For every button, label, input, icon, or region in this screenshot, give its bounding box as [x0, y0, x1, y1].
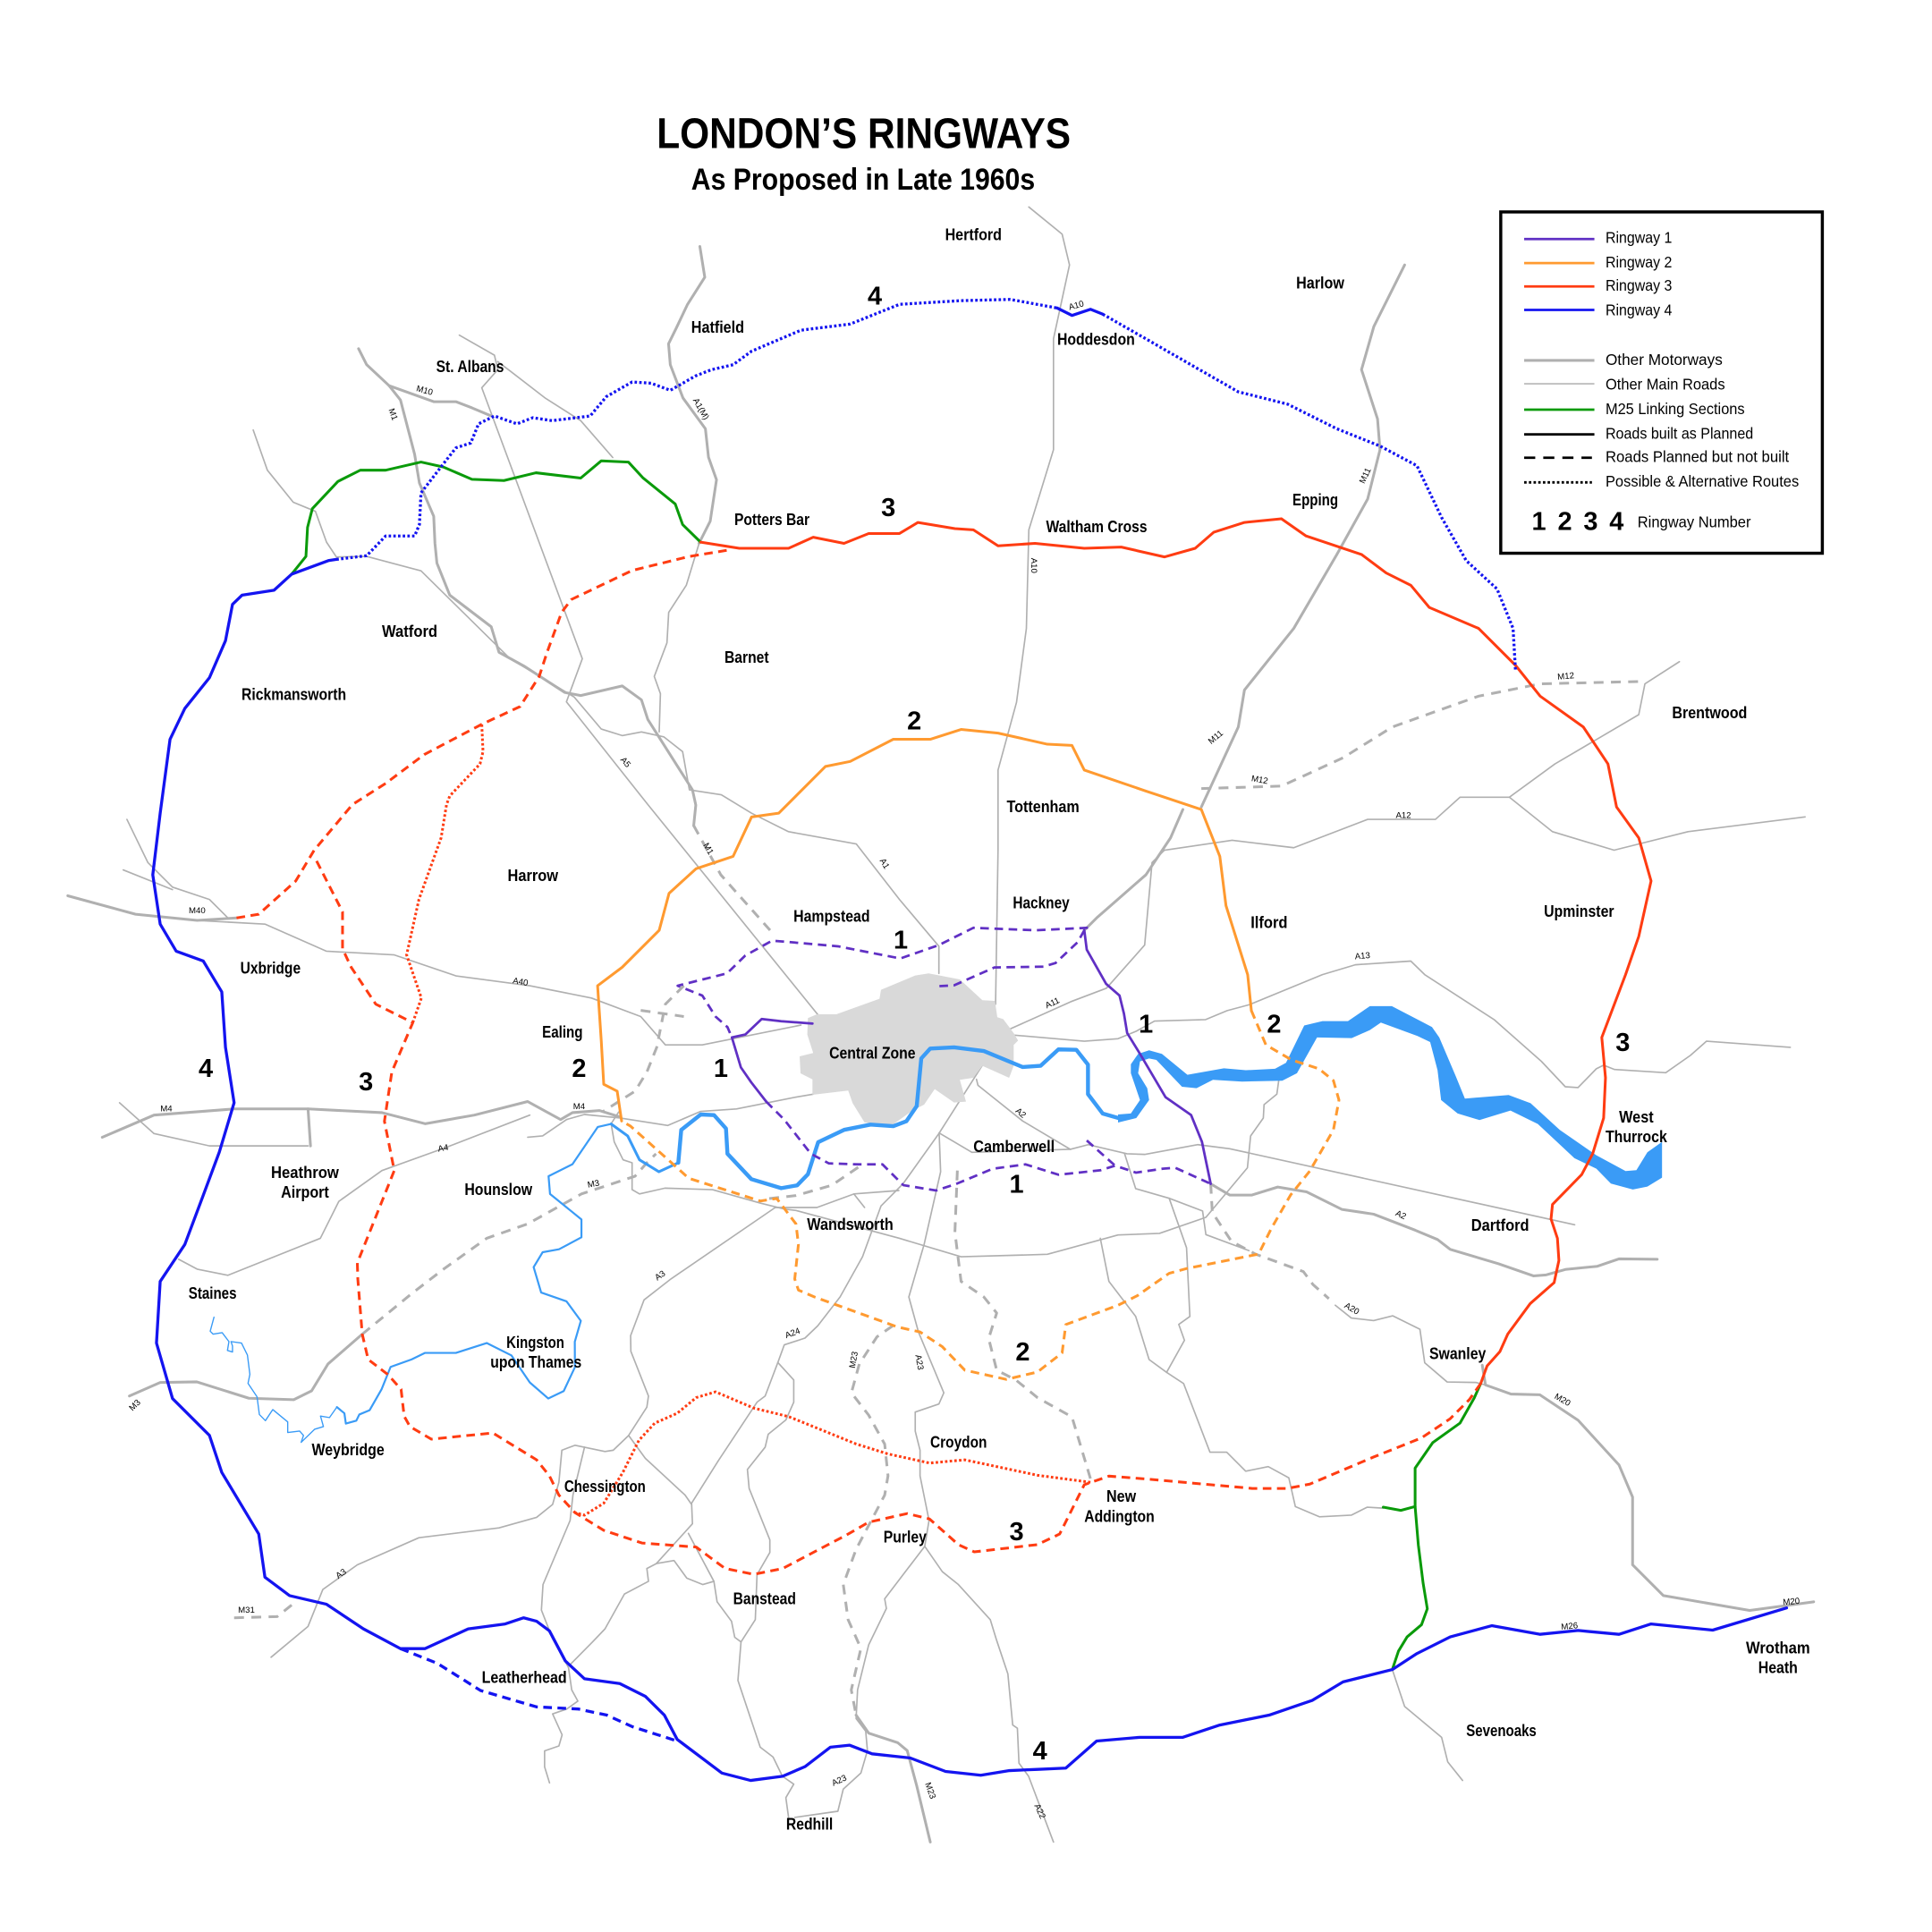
place names: Watford: [382, 622, 437, 640]
place names: Thurrock: [1606, 1127, 1667, 1146]
legend sample lines: [1524, 239, 1595, 482]
legend text: M25 Linking Sections: [1606, 400, 1745, 418]
place names: Purley: [884, 1528, 927, 1546]
ringway 3: [236, 519, 1651, 1574]
place names: Barnet: [724, 648, 769, 666]
place names: St. Albans: [436, 357, 504, 376]
ringway numbers: 2: [1015, 1338, 1030, 1367]
legend ringway numbers: 2: [1557, 507, 1572, 536]
place names: Leatherhead: [482, 1668, 567, 1687]
title: LONDON’S RINGWAYS: [657, 109, 1071, 157]
road number labels: A4: [437, 1143, 450, 1155]
ringway numbers: 3: [1009, 1518, 1024, 1546]
central zone: [800, 973, 1018, 1125]
place names: Heath: [1758, 1658, 1798, 1677]
place names: Airport: [281, 1182, 329, 1201]
other main roads: [120, 207, 1805, 1842]
legend text: [1606, 228, 1799, 531]
road number labels: A13: [1354, 951, 1370, 962]
place names: Waltham Cross: [1046, 517, 1148, 536]
legend text: Possible & Alternative Routes: [1606, 472, 1799, 490]
place names: Ilford: [1250, 912, 1288, 931]
road number labels: A1(M): [691, 396, 711, 422]
place names: Hampstead: [793, 906, 870, 925]
ringway 1: [678, 928, 1211, 1191]
ringway numbers: 1: [1009, 1170, 1024, 1199]
road number labels: M31: [238, 1606, 255, 1615]
ringway numbers: 2: [907, 708, 921, 736]
road number labels: [128, 299, 1801, 1820]
place names: Hounslow: [464, 1180, 533, 1199]
place names: [189, 225, 1810, 1834]
subtitle: As Proposed in Late 1960s: [691, 163, 1035, 197]
place names: West: [1619, 1107, 1654, 1126]
ringway 4: [153, 300, 1786, 1781]
road number labels: A11: [1044, 996, 1062, 1011]
ringway numbers: 1: [894, 927, 908, 955]
place names: Wandsworth: [807, 1215, 894, 1233]
road number labels: A23: [912, 1354, 925, 1371]
road number labels: M23: [848, 1351, 860, 1369]
road number labels: A24: [784, 1326, 802, 1341]
place names: Potters Bar: [734, 510, 809, 529]
ringway numbers: 3: [359, 1068, 373, 1097]
legend text: Ringway 2: [1606, 253, 1672, 271]
place names: Hoddesdon: [1057, 330, 1135, 349]
legend ringway numbers: 1: [1532, 507, 1546, 536]
legend text: Roads Planned but not built: [1606, 448, 1789, 466]
road number labels: A5: [618, 755, 632, 770]
place names: Epping: [1292, 490, 1338, 509]
ringway numbers: 4: [199, 1055, 213, 1083]
road number labels: M12: [1250, 774, 1268, 786]
road number labels: A1: [877, 857, 891, 871]
road number labels: M3: [587, 1179, 600, 1191]
place names: Chessington: [564, 1477, 646, 1496]
place names: Staines: [189, 1284, 236, 1302]
legend text: Ringway Number: [1638, 513, 1751, 531]
place names: Upminster: [1544, 902, 1614, 920]
ringway numbers: 1: [714, 1055, 728, 1083]
place names: Hatfield: [691, 318, 744, 336]
road number labels: M26: [1561, 1621, 1579, 1632]
road number labels: M4: [573, 1102, 586, 1112]
M25 linking sections: [292, 461, 1480, 1670]
place names: Brentwood: [1672, 703, 1747, 722]
unbuilt motorways (grey dashed): [234, 682, 1645, 1716]
place names: Weybridge: [312, 1440, 385, 1459]
ringway numbers: 3: [881, 494, 895, 522]
road number labels: M1: [700, 842, 716, 857]
ringway numbers: 2: [1267, 1010, 1281, 1038]
place names: Harrow: [508, 866, 559, 885]
road number labels: A3: [653, 1269, 667, 1283]
place names: Sevenoaks: [1466, 1721, 1537, 1740]
ringway numbers: 1: [1139, 1010, 1153, 1038]
place names: Ealing: [542, 1022, 583, 1041]
place names: Central Zone: [829, 1043, 916, 1062]
other motorways: [68, 247, 1814, 1842]
place names: Hackney: [1013, 893, 1070, 911]
place names: Wrotham: [1746, 1639, 1810, 1657]
road number labels: A10: [1068, 299, 1085, 313]
road number labels: A2: [1394, 1208, 1408, 1222]
road number labels: M20: [1783, 1597, 1801, 1607]
ringway 2: [597, 730, 1339, 1379]
river thames: [210, 1006, 1662, 1443]
road number labels: A12: [1395, 811, 1411, 821]
ringway numbers: 3: [1615, 1029, 1630, 1057]
place names: Addington: [1084, 1506, 1155, 1525]
place names: Harlow: [1296, 273, 1344, 292]
place names: New: [1106, 1487, 1137, 1505]
road number labels: M3: [128, 1398, 143, 1413]
legend ringway numbers: 4: [1609, 507, 1623, 536]
legend: [1501, 212, 1822, 554]
place names: Hertford: [945, 225, 1002, 244]
place names: Heathrow: [271, 1163, 339, 1182]
road number labels: A40: [512, 976, 529, 988]
place names: Tottenham: [1006, 797, 1080, 816]
road number labels: A22: [1032, 1802, 1047, 1820]
road number labels: M40: [189, 906, 206, 916]
legend ringway numbers: [1532, 507, 1623, 536]
road number labels: M1: [386, 407, 399, 422]
place names: Banstead: [733, 1589, 796, 1608]
road number labels: M11: [1207, 729, 1225, 747]
legend text: Ringway 4: [1606, 301, 1672, 319]
road number labels: M10: [415, 384, 434, 398]
legend text: Ringway 3: [1606, 276, 1672, 294]
legend text: Other Main Roads: [1606, 375, 1725, 393]
legend text: Ringway 1: [1606, 228, 1672, 246]
ringway numbers: 4: [868, 282, 882, 310]
legend text: Roads built as Planned: [1606, 424, 1753, 442]
legend text: Other Motorways: [1606, 351, 1723, 369]
road number labels: A3: [335, 1567, 349, 1581]
place names: Dartford: [1471, 1216, 1530, 1234]
road number labels: A10: [1029, 558, 1038, 573]
place names: Uxbridge: [241, 958, 301, 977]
road number labels: M11: [1358, 467, 1374, 486]
road number labels: M12: [1557, 671, 1574, 682]
place names: Rickmansworth: [242, 684, 346, 703]
road number labels: M23: [922, 1781, 937, 1801]
road number labels: A2: [1013, 1106, 1028, 1121]
road number labels: A20: [1343, 1301, 1360, 1318]
place names: Croydon: [930, 1433, 987, 1452]
road number labels: A23: [830, 1773, 849, 1789]
ringway numbers: [199, 282, 1630, 1766]
road number labels: M20: [1553, 1392, 1572, 1409]
place names: Swanley: [1429, 1343, 1487, 1362]
road number labels: M4: [160, 1105, 173, 1114]
ringway numbers: 4: [1033, 1737, 1047, 1766]
ringway numbers: 2: [572, 1055, 586, 1083]
place names: Redhill: [786, 1815, 833, 1834]
place names: Camberwell: [973, 1137, 1055, 1156]
place names: Kingston: [506, 1333, 564, 1352]
legend ringway numbers: 3: [1583, 507, 1597, 536]
place names: upon Thames: [490, 1352, 581, 1371]
